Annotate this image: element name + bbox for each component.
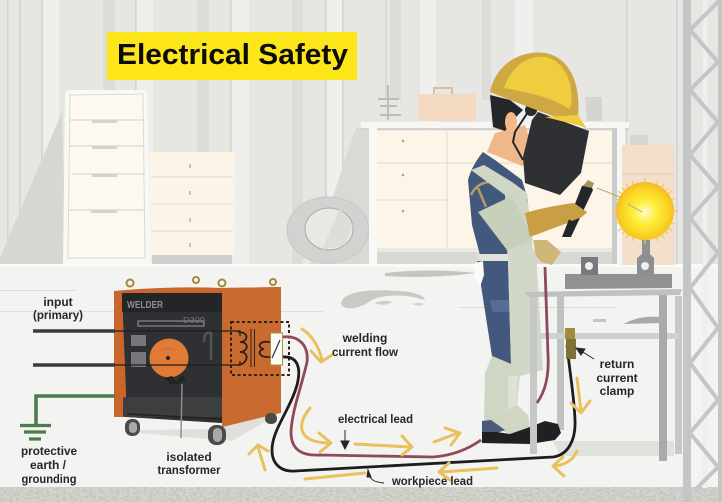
ground wire and symbol [20,396,115,439]
wheels [125,413,280,445]
face shield [523,112,589,195]
welding gun [562,184,593,237]
shoulder seam [471,182,497,207]
sock and boot [482,420,505,433]
label: input primary: (primary) [33,308,83,322]
white rag [474,261,484,287]
label: protective earth grounding: protective [21,444,77,458]
pointers [181,348,594,483]
return current clamp [565,328,576,359]
label: return current clamp [596,357,638,398]
hard hat [490,52,586,128]
toolbox on shelf [418,88,476,121]
label: isolated transformer [158,450,221,477]
lower glove [533,240,561,265]
input lines [33,331,240,365]
label: isolated transformer: isolated [166,450,212,464]
label: workpiece lead: workpiece lead [391,474,473,488]
hand gripping gun [564,203,587,221]
electrical lead [283,267,548,457]
label: input primary [33,295,83,322]
workpiece lead [272,345,575,471]
shadow behind tall cabinet [0,112,66,264]
floor [0,264,722,489]
model number: D300 [183,316,206,325]
label: return current clamp: return [600,357,634,371]
floor gravel strip [0,487,722,502]
label: protective earth grounding [21,444,77,486]
hanging rings [126,277,276,286]
forearm glove [525,203,587,237]
label: return current clamp: current [596,371,638,385]
welder worker [468,52,594,444]
label: welding current flow: welding [342,331,387,345]
peach cabinet [622,135,674,265]
label: welding current flow [332,331,399,359]
steel tower [683,0,722,502]
leg [484,356,530,434]
label: input primary: input [43,295,73,309]
tall drawer cabinet [63,90,151,264]
sleeve [478,196,533,250]
label: isolated transformer: transformer [158,463,221,477]
trousers [477,260,511,364]
apron strap and bib [471,165,533,250]
small stand on shelf [378,85,401,120]
label: protective earth grounding: earth / [30,458,67,472]
apron skirt [507,250,543,376]
chin strap [513,112,528,160]
ear [505,112,517,132]
tyre [287,128,374,264]
welder machine [114,277,281,445]
label: electrical lead: electrical lead [338,412,413,426]
label: welding current flow: current flow [332,345,399,359]
title [107,32,357,80]
belt [477,254,508,261]
title: Electrical Safety [117,39,348,71]
grey can on shelf [585,97,602,121]
welder label: WELDER [127,300,164,311]
label: return current clamp: clamp [600,384,634,398]
current flow arrows [249,329,590,480]
wall background [0,0,722,266]
shelf unit [361,122,629,264]
welding arc spark [597,178,678,244]
low drawer chest [150,152,235,264]
label: protective earth grounding: grounding [22,472,76,486]
transformer schematic [231,322,289,375]
hair [490,95,523,131]
welding table back parts [537,240,682,461]
neck and face [487,125,535,166]
shirt torso [468,152,528,255]
welding table front parts [525,289,682,454]
